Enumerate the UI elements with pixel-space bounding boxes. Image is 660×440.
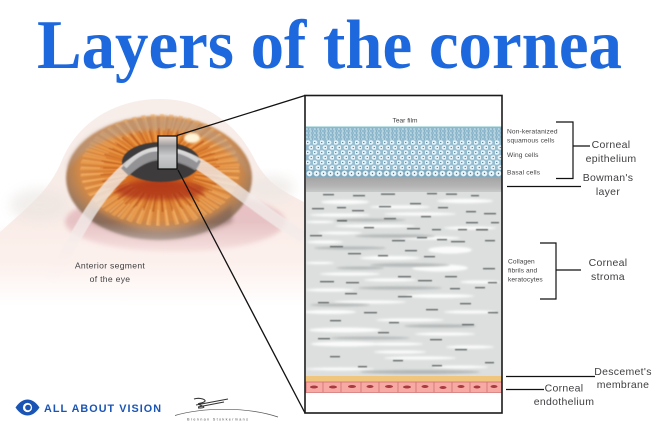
label: Bowman's layer: Bowman's (583, 172, 633, 184)
labels: epithelium cell types (507, 128, 558, 176)
label: corneal stroma (589, 257, 627, 283)
label: collagen fibrils and keratocytes: fibrils and (508, 268, 538, 274)
panel: cornea cross-section (304, 96, 502, 413)
iris radial fibres (92, 122, 228, 218)
zoom line: bottom (178, 170, 305, 413)
Descemet's membrane (306, 376, 502, 382)
bracket: corneal epithelium (556, 122, 590, 178)
labels: epithelium cell types: squamous cells (507, 138, 555, 144)
bright reflection (184, 133, 200, 143)
magnified sample box on cornea (158, 136, 177, 169)
icon: eye (16, 400, 40, 416)
tear film layer (306, 126, 502, 128)
pink lower ciliary band (65, 192, 285, 252)
labels: epithelium cell types: Wing cells (507, 152, 539, 159)
signature: Brennan Stokkermans (175, 398, 278, 422)
bracket: corneal stroma (540, 243, 581, 299)
reddish iris near pupil (115, 180, 205, 200)
pupil (122, 142, 200, 182)
leader: Bowman's layer (507, 186, 581, 188)
grey haze on top of the eye (66, 117, 251, 178)
logo: All About Vision (16, 400, 162, 416)
label: collagen fibrils and keratocytes (508, 258, 543, 284)
surrounding tissue (0, 99, 304, 306)
label: Descemet's membrane (594, 366, 652, 391)
label: Descemet's membrane: membrane (597, 379, 649, 391)
dark lower iris rim (90, 205, 232, 240)
title: Layers of the cornea (37, 7, 622, 84)
logo text: ALL ABOUT VISION (44, 403, 162, 415)
label: anterior segment (75, 260, 145, 284)
epithelium: wing cells (306, 140, 502, 170)
stroma (304, 192, 502, 376)
label: collagen fibrils and keratocytes: Collagen (508, 258, 535, 266)
iris (66, 116, 252, 240)
cornea band (50, 153, 304, 282)
epithelium: basal cells (306, 170, 502, 177)
leader: Descemet's membrane (506, 376, 595, 378)
tear film label: Tear film (393, 118, 418, 124)
label: corneal endothelium (534, 382, 594, 408)
labels: epithelium cell types: Basal cells (507, 170, 541, 176)
panel frame (305, 96, 502, 413)
label: anterior segment: of the eye (90, 274, 130, 284)
label: anterior segment: Anterior segment (75, 260, 145, 270)
label: corneal endothelium: Corneal (545, 382, 583, 394)
leader: corneal endothelium (506, 388, 544, 390)
label: Bowman's layer: layer (596, 186, 620, 198)
signature: Brennan Stokkermans: Brennan Stokkermans (187, 418, 249, 422)
illustration: anterior segment of the eye (0, 99, 304, 307)
label: Bowman's layer (583, 172, 633, 198)
Bowman's layer (306, 177, 502, 192)
label: corneal stroma: stroma (591, 271, 625, 283)
label: corneal epithelium: epithelium (586, 153, 636, 165)
zoom line: top (177, 96, 305, 136)
label: corneal stroma: Corneal (589, 257, 627, 269)
label: corneal endothelium: endothelium (534, 396, 594, 408)
epithelium: squamous cells (306, 128, 502, 140)
label: collagen fibrils and keratocytes: keratocytes (508, 276, 543, 284)
label: Descemet's membrane: Descemet's (594, 366, 652, 378)
endothelium (306, 382, 502, 392)
fade toward the bottom (0, 222, 304, 307)
label: corneal epithelium: Corneal (592, 139, 630, 151)
labels: epithelium cell types: Non-keratanized (507, 128, 558, 136)
label: corneal epithelium (586, 139, 636, 165)
